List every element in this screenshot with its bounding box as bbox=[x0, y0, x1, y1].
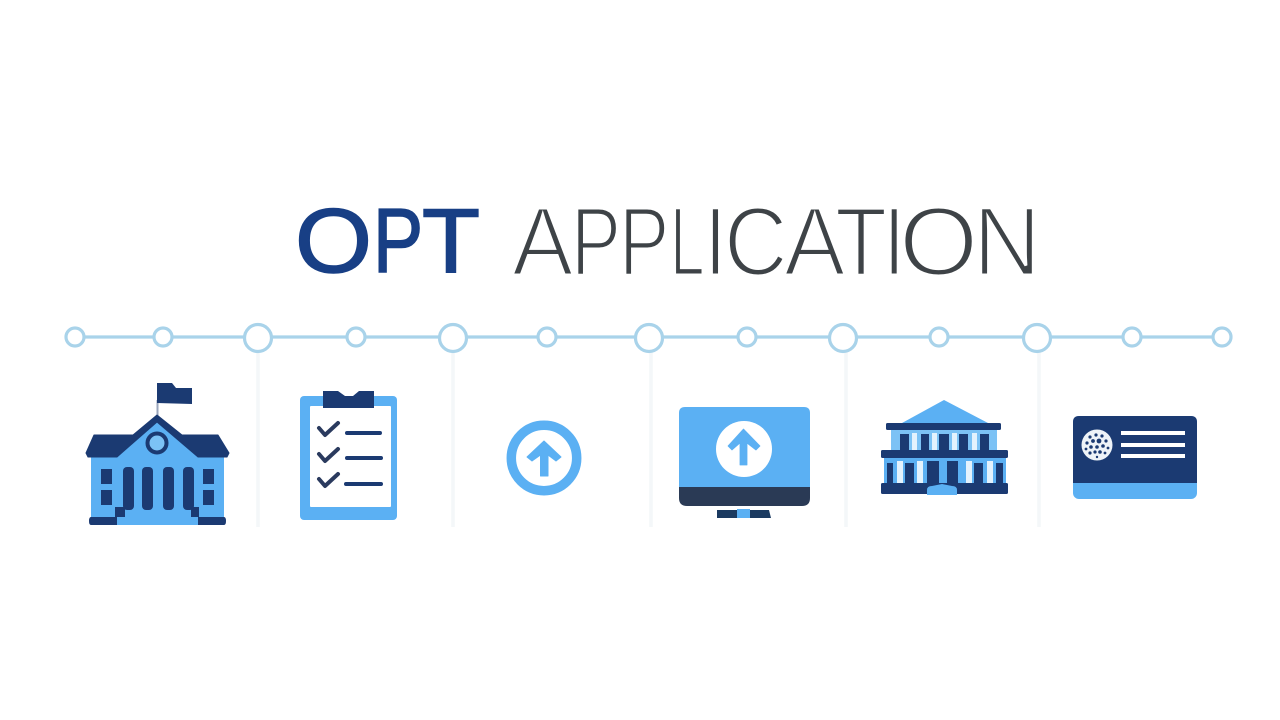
icon: employment card bbox=[1073, 416, 1197, 499]
title: A bbox=[512, 187, 573, 296]
title: O bbox=[295, 191, 372, 292]
title: C bbox=[724, 187, 788, 296]
icon: computer monitor upload bbox=[679, 407, 810, 518]
title: T bbox=[422, 191, 480, 292]
title: P bbox=[571, 187, 621, 296]
title: O bbox=[899, 187, 978, 296]
title: P bbox=[373, 191, 423, 292]
title bbox=[295, 187, 1041, 296]
icon: government bank building bbox=[881, 400, 1008, 495]
title: I bbox=[704, 187, 727, 296]
title: A bbox=[784, 187, 845, 296]
timeline bbox=[66, 324, 1231, 352]
icon: university building bbox=[86, 383, 229, 525]
title: N bbox=[973, 187, 1041, 296]
icon: upload circle bbox=[511, 425, 577, 491]
title: I bbox=[883, 187, 905, 296]
icon: checklist clipboard bbox=[300, 391, 397, 520]
title: P bbox=[619, 187, 669, 296]
title: L bbox=[670, 187, 704, 296]
title: T bbox=[835, 187, 887, 296]
